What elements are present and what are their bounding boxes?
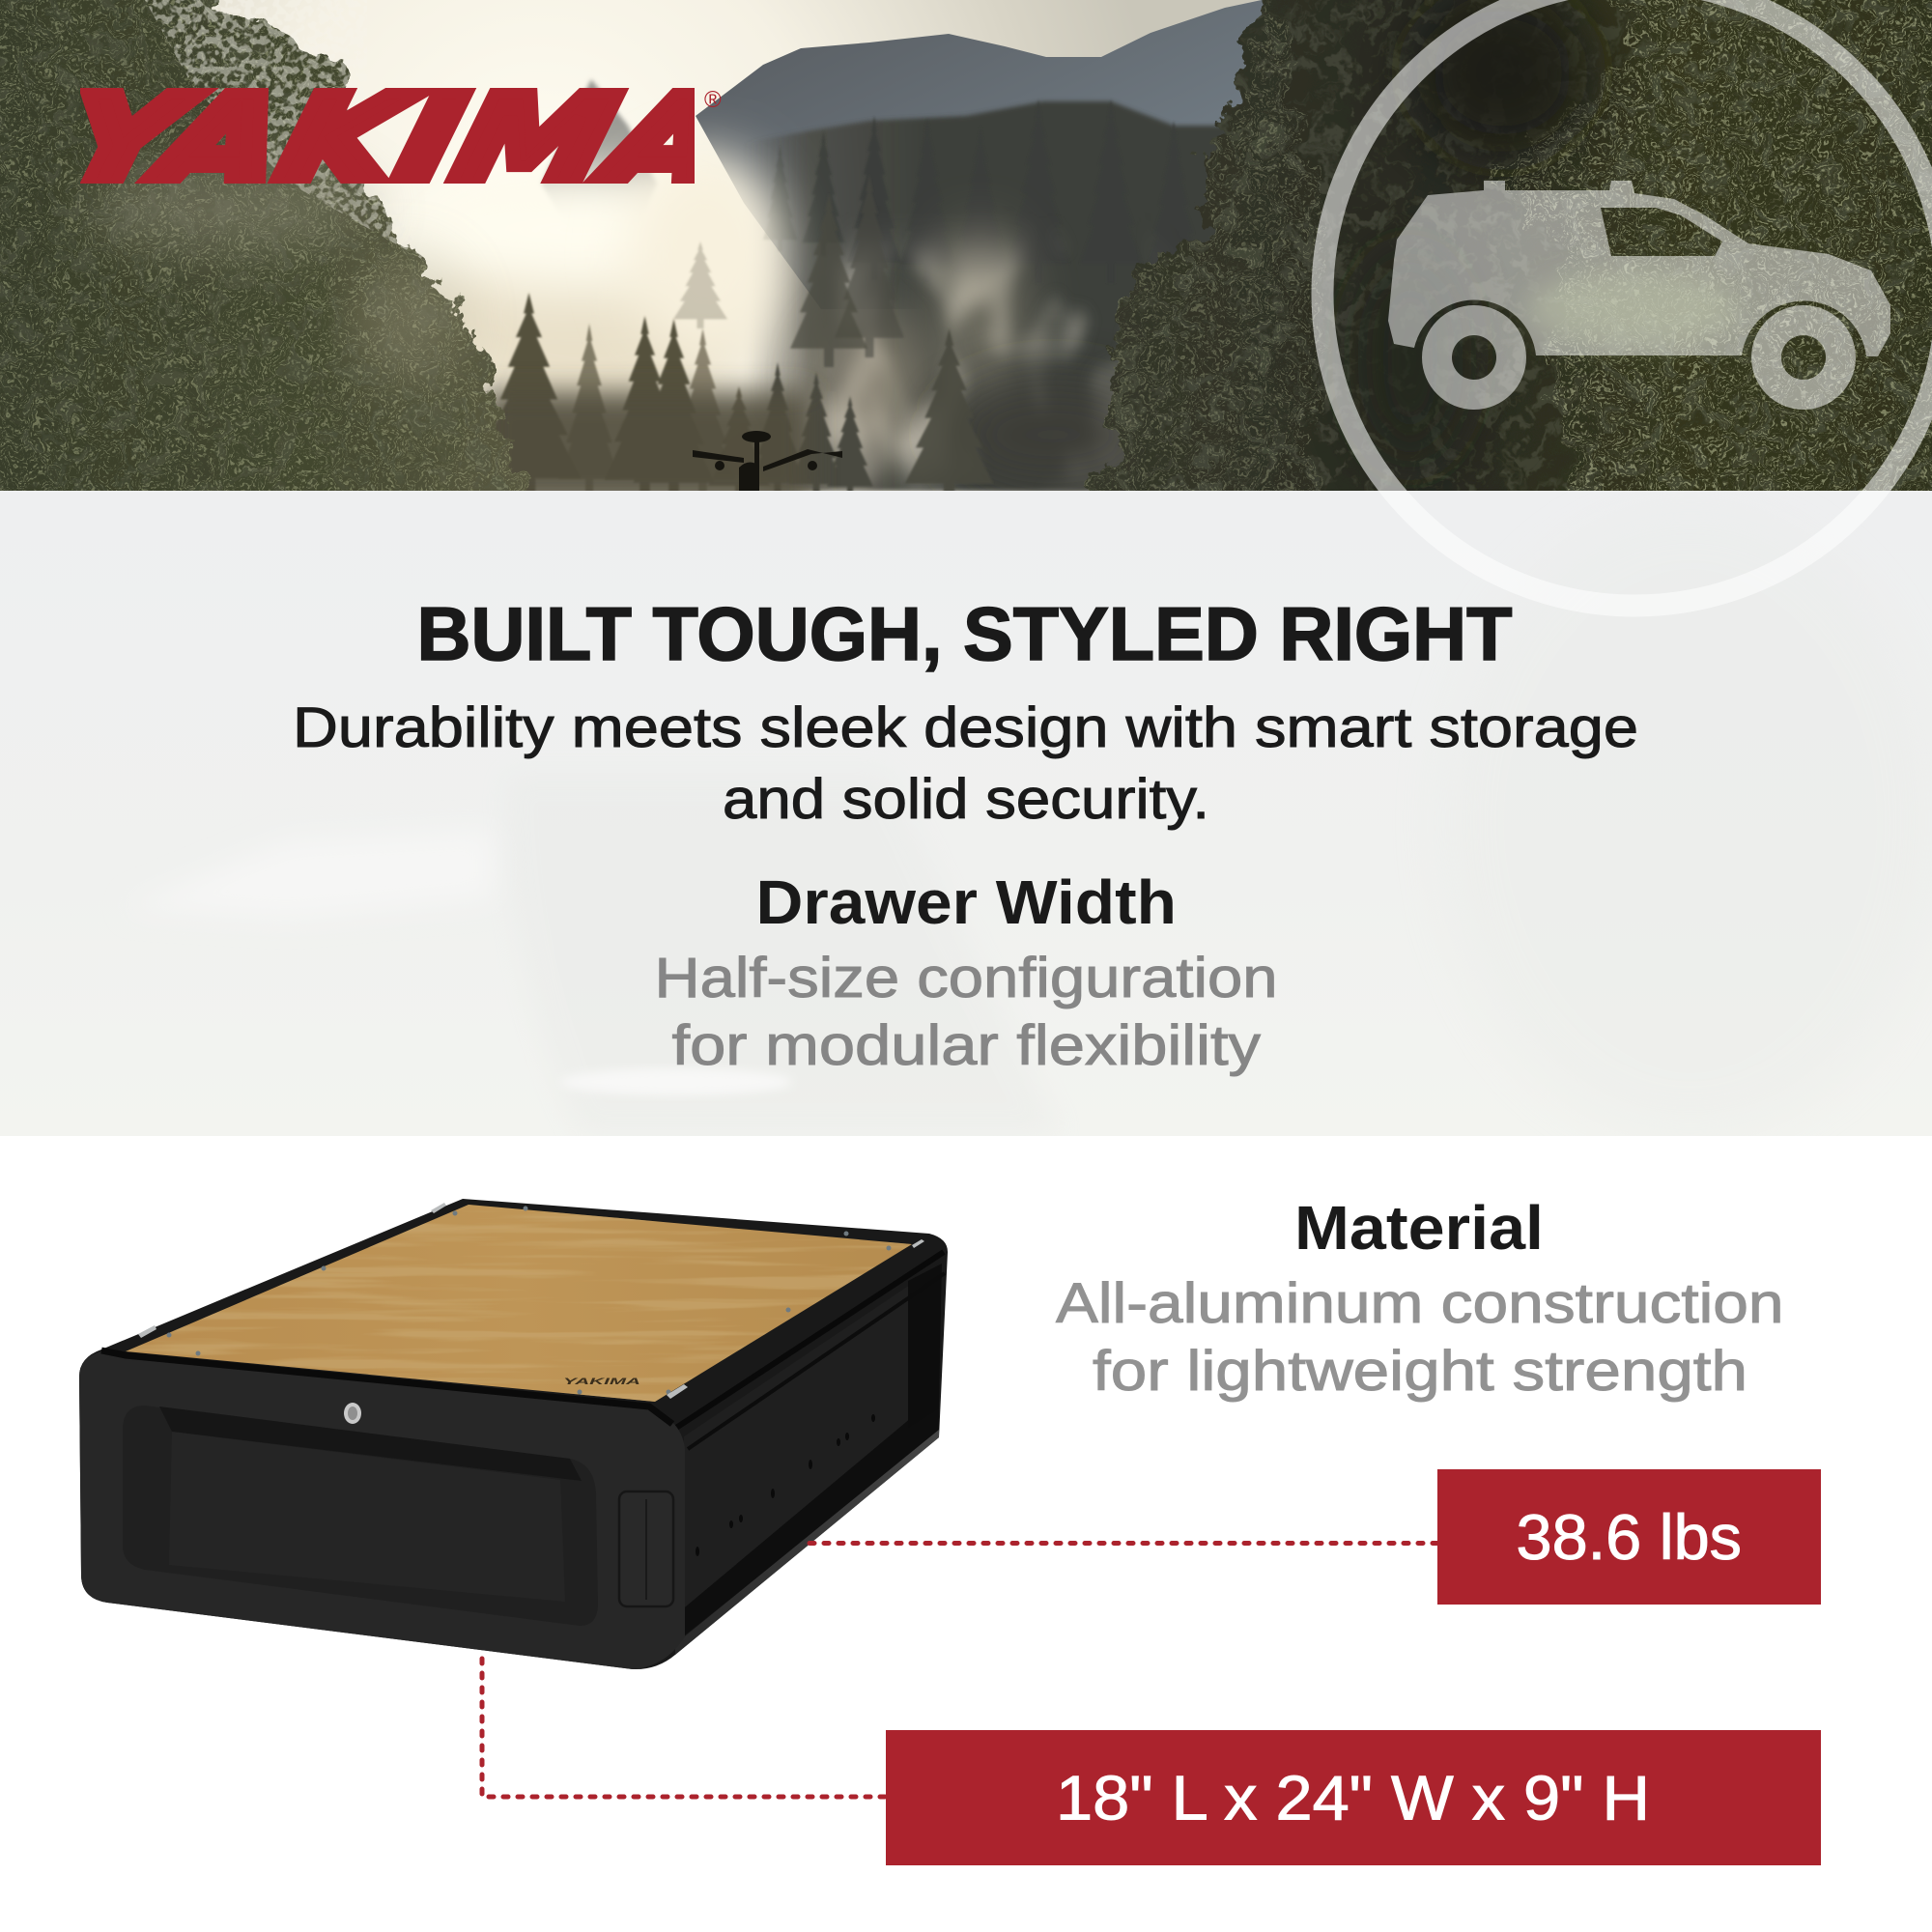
callout: dimensions: 18" L x 24" W x 9" H bbox=[1056, 1762, 1650, 1833]
callout: dimensions bbox=[886, 1730, 1821, 1865]
drawer body bbox=[79, 1199, 948, 1669]
logo: Yakima wordmark: YAKIMA bbox=[48, 69, 748, 213]
hero photo: misty mountain forest bbox=[0, 0, 1932, 522]
subtitle bbox=[293, 696, 1638, 831]
text block: material: All-aluminum construction bbox=[1056, 1272, 1783, 1335]
subtitle: Durability meets sleek design with smart storage bbox=[293, 696, 1638, 759]
icon: vehicle silhouette bbox=[1388, 181, 1890, 410]
text block: material: for lightweight strength bbox=[1093, 1340, 1747, 1403]
icon: circle with vehicle bbox=[1322, 0, 1932, 606]
text block: drawer width: for modular flexibility bbox=[672, 1014, 1261, 1077]
logo: Yakima wordmark: ® bbox=[704, 87, 722, 113]
connector: dimensions leader line bbox=[482, 1659, 886, 1797]
bike handlebars silhouette bbox=[693, 431, 842, 491]
drawer side panel bbox=[675, 1252, 945, 1655]
left tree canopy gaps and haze bbox=[87, 0, 464, 386]
left foreground tree bbox=[0, 0, 529, 522]
dark mid forest bbox=[734, 99, 1246, 491]
logo: Yakima wordmark bbox=[80, 88, 721, 184]
drawer front face bbox=[79, 1350, 685, 1669]
drawer wood top: YAKIMA bbox=[563, 1377, 640, 1386]
connector: weight leader line bbox=[810, 1541, 1437, 1546]
text block: material: Material bbox=[1294, 1193, 1544, 1263]
drawer wood top bbox=[126, 1203, 924, 1402]
drawer lock bbox=[344, 1403, 361, 1424]
right foreground tree bbox=[1095, 0, 1932, 522]
subtitle: and solid security. bbox=[723, 768, 1209, 831]
product: drawer illustration bbox=[79, 1199, 948, 1669]
text block: material bbox=[1056, 1193, 1783, 1403]
text block: drawer width: Drawer Width bbox=[755, 867, 1177, 937]
callout: weight: 38.6 lbs bbox=[1517, 1501, 1742, 1573]
distant mountains bbox=[541, 0, 1264, 308]
panel: misty text background bbox=[0, 491, 1932, 1140]
sun glow and fog bbox=[433, 118, 1124, 491]
title: BUILT TOUGH, STYLED RIGHT bbox=[417, 591, 1513, 676]
right tree shadow and lit foliage bbox=[1357, 0, 1739, 464]
text block: drawer width bbox=[655, 867, 1277, 1077]
drawer side latch bbox=[619, 1492, 673, 1606]
spruces in the fog bbox=[477, 174, 993, 507]
text block: drawer width: Half-size configuration bbox=[655, 947, 1277, 1009]
callout: weight bbox=[1437, 1469, 1821, 1605]
